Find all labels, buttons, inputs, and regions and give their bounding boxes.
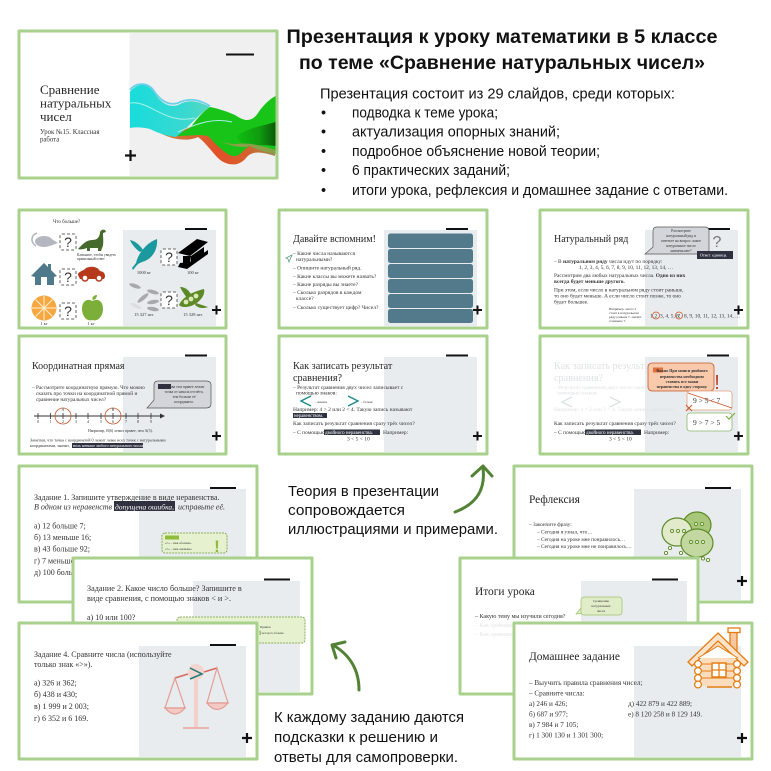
text bbox=[528, 521, 632, 550]
question boxes bbox=[60, 234, 177, 319]
question boxes: ? bbox=[64, 269, 72, 285]
question list: классе? bbox=[296, 296, 314, 302]
callout: натуральных bbox=[591, 604, 611, 608]
caption: theory: сопровождается bbox=[288, 503, 405, 519]
text block: slide list: • bbox=[321, 144, 326, 160]
example note: ряду раньше 7, значит, bbox=[609, 315, 642, 320]
example note: 2 меньше 7. bbox=[609, 319, 626, 323]
bottom note: координатами, значит, bbox=[30, 443, 70, 449]
task list bbox=[34, 678, 89, 723]
text: – Сегодня на уроке мне понравилось… bbox=[536, 537, 625, 543]
callout: точка от начала отсчёта, bbox=[164, 390, 204, 395]
text block: slide list: Презентация состоит из 29 слайдов, среди которых: bbox=[320, 86, 675, 102]
task text bbox=[34, 493, 225, 512]
homework text: г) 1 300 130 и 1 301 300; bbox=[529, 732, 603, 740]
icon: seeds bbox=[129, 282, 159, 312]
callout: Справа тем правее лежит bbox=[164, 385, 205, 389]
weights bbox=[40, 270, 203, 326]
example note: стоит в натуральном bbox=[609, 311, 640, 315]
text: Например: 4 > 2 или 2 < 4. Такую запись называют bbox=[293, 407, 413, 413]
question list: – Сколько существует цифр? Чисел? bbox=[292, 304, 379, 311]
number line: 2 bbox=[62, 419, 64, 424]
text: – В натуральном ряду числа идут по порядку: bbox=[553, 259, 663, 265]
callout: Сравнение bbox=[593, 599, 609, 603]
caption: theory: иллюстрациями и примерами. bbox=[288, 522, 498, 538]
text: Рассмотрим два любых натуральных числа. Одно из них bbox=[554, 272, 686, 279]
arrow: up to theory slides bbox=[455, 466, 492, 512]
caption: hints bbox=[274, 710, 464, 766]
task text: Задание 2. Какое число больше? Запишите в bbox=[87, 584, 242, 593]
number row bbox=[650, 312, 740, 320]
number line: 1 bbox=[50, 419, 52, 424]
number row: 3, 4, 5, 6, bbox=[660, 314, 681, 320]
slide: homework bbox=[514, 623, 752, 759]
text block: slide list: итоги урока, рефлексия и домашнее задание с ответами. bbox=[352, 183, 728, 199]
text: – Какую тему мы изучили сегодня? bbox=[474, 614, 566, 620]
faded text: помощью знаков: bbox=[557, 390, 598, 396]
slide title: чисел bbox=[40, 109, 72, 124]
callout bbox=[147, 381, 211, 408]
heading: Как записать результат bbox=[293, 361, 393, 372]
main heading: по теме «Сравнение натуральных чисел» bbox=[299, 52, 705, 74]
icon: pointer bbox=[286, 255, 292, 262]
homework text: – Сравните числа: bbox=[528, 690, 585, 698]
hint: «<» – знак «меньше» bbox=[165, 547, 192, 551]
warning callout: Важно При записи двойного bbox=[656, 368, 708, 373]
arrow: to task slides bbox=[332, 642, 359, 690]
question boxes: ? bbox=[165, 292, 173, 308]
question boxes: ? bbox=[64, 303, 72, 319]
icon: orange bbox=[32, 296, 56, 320]
subtitle: Урок №15. Классная bbox=[40, 129, 99, 136]
faded text: сравнения? bbox=[554, 373, 604, 384]
question boxes: ? bbox=[165, 249, 173, 265]
task text: допущена ошибка, bbox=[115, 502, 174, 512]
caption: hints: подсказки к решению и bbox=[274, 730, 438, 746]
answers list: д) 100 больше 99. bbox=[34, 568, 94, 577]
caption: hints: ответы для самопроверки. bbox=[274, 750, 458, 766]
number line bbox=[34, 407, 165, 424]
task text: только знак «>»). bbox=[34, 660, 92, 669]
icon: log cabin bbox=[688, 628, 748, 688]
icon: house bbox=[31, 263, 57, 285]
hint: ! bbox=[214, 537, 220, 556]
callout: Рассмотрите bbox=[671, 229, 691, 233]
bottom note: Заметим, что точка с координатой 0 лежит левее всех точек с натуральными bbox=[30, 438, 166, 444]
number line: 4 bbox=[87, 419, 89, 424]
number line: 9 bbox=[150, 419, 152, 424]
text: 3 < 5 < 10 bbox=[609, 436, 632, 442]
bottom note bbox=[30, 438, 166, 449]
faded text: Как записать результат bbox=[554, 361, 654, 372]
right example: 9 > 7 > 5 bbox=[693, 418, 720, 427]
number line: 8 bbox=[137, 419, 139, 424]
highlighted terms: двойного неравенства. bbox=[325, 431, 373, 436]
weights: 1 кг bbox=[87, 321, 95, 326]
text: – Рассмотрите координатную прямую. Что можно bbox=[31, 385, 145, 391]
slide: task 1 bbox=[19, 466, 257, 602]
text: будет большее. bbox=[554, 298, 589, 306]
hint bbox=[177, 617, 305, 643]
icon: car bbox=[78, 267, 105, 279]
main heading bbox=[286, 26, 718, 74]
wrong example: 9 > 5 < 7 bbox=[693, 396, 720, 405]
text block: slide list: • bbox=[321, 163, 326, 179]
text: – С помощью bbox=[553, 430, 586, 436]
heading: Итоги урока bbox=[475, 586, 535, 598]
slide: coordinate line bbox=[19, 336, 226, 454]
callout: натуральный ряд и bbox=[666, 234, 696, 238]
slide: natural series bbox=[540, 210, 748, 328]
text: При этом, если число в натуральном ряду стоит раньше, bbox=[554, 288, 684, 294]
answers list: в) 43 больше 92; bbox=[34, 544, 90, 554]
text block: slide list: • bbox=[321, 124, 326, 140]
task text: Задание 4. Сравните числа (используйте bbox=[34, 650, 172, 659]
text: 3 < 5 < 10 bbox=[347, 436, 370, 442]
number line: 6 bbox=[112, 419, 114, 424]
answers list bbox=[34, 522, 94, 577]
homework text: е) 8 120 258 и 8 129 149. bbox=[628, 710, 702, 718]
hint: «>» – знак «больше» bbox=[165, 541, 192, 545]
hint: ! bbox=[259, 631, 261, 637]
text: Как записать результат сравнения сразу трёх чисел? bbox=[554, 421, 676, 427]
slide: reflection bbox=[514, 466, 752, 602]
slide: writing the comparison bbox=[279, 336, 487, 454]
bottom note: ноль меньше любого натурального числа. bbox=[73, 443, 144, 448]
text: – Сегодня я узнал, что… bbox=[536, 530, 593, 536]
icon: scales bbox=[165, 664, 228, 728]
homework text: а) 246 и 426; bbox=[529, 700, 567, 708]
warning callout: неравенства в одну сторону. bbox=[657, 384, 707, 389]
text block: slide list: 6 практических заданий; bbox=[352, 163, 510, 179]
callout: координата. bbox=[174, 400, 194, 404]
icon: pea pod bbox=[179, 287, 208, 308]
answer button: Ответ: единица. bbox=[700, 252, 727, 258]
text: сравнение натуральных чисел? bbox=[36, 397, 107, 403]
heading: сравнения? bbox=[293, 373, 343, 384]
highlighted terms: неравенством. bbox=[294, 414, 323, 419]
signs bbox=[301, 396, 358, 406]
text block: slide list: • bbox=[321, 183, 326, 199]
plus of reflection slide bbox=[737, 576, 747, 586]
task text: виде сравнения, с помощью знаков < и >. bbox=[87, 594, 231, 603]
text bbox=[553, 259, 686, 306]
callout: натуральное число bbox=[666, 244, 696, 248]
callout bbox=[576, 597, 622, 615]
number row: 2 bbox=[654, 314, 658, 320]
warning callout: неравенства необходимо bbox=[660, 374, 704, 379]
caption: hints: К каждому заданию даются bbox=[274, 710, 464, 726]
number line: A bbox=[62, 407, 65, 412]
text: – Как сравнивать числа? bbox=[474, 632, 538, 638]
answer cover bars bbox=[388, 234, 473, 323]
heading: Рефлексия bbox=[529, 494, 581, 506]
slide: double inequality warning bbox=[540, 336, 748, 454]
text: – Закончите фразу: bbox=[528, 521, 572, 528]
slide: summary bbox=[460, 558, 698, 694]
homework text: – Выучить правила сравнения чисел; bbox=[528, 679, 642, 687]
caption: theory bbox=[288, 484, 498, 538]
faded text: – Результат сравнения двух чисел записывает с bbox=[553, 385, 665, 391]
subtitle: работа bbox=[40, 136, 59, 144]
task text: Задание 1. Запишите утверждение в виде неравенства. bbox=[34, 493, 220, 502]
text: – Результат сравнения двух чисел записывает с bbox=[292, 385, 404, 391]
warning callout bbox=[648, 363, 714, 391]
slide: double inequality warning: двойного неравенства. bbox=[586, 431, 634, 436]
heading: Давайте вспомним! bbox=[293, 234, 376, 245]
question list: – Опишите натуральный ряд. bbox=[292, 264, 362, 272]
text bbox=[292, 385, 415, 442]
callout bbox=[645, 227, 709, 254]
text block: slide list bbox=[320, 86, 728, 199]
slide: writing the comparison: – меньше bbox=[314, 400, 328, 404]
text: Например: bbox=[644, 430, 670, 436]
heading: Натуральный ряд bbox=[554, 234, 628, 245]
answers list: а) 12 больше 7; bbox=[34, 522, 86, 530]
number line: 7 bbox=[125, 419, 127, 424]
callout: чисел bbox=[597, 609, 606, 613]
question boxes: ? bbox=[64, 234, 72, 250]
callout: ответьте на вопрос: какое bbox=[661, 239, 701, 243]
icon: apple bbox=[82, 295, 103, 320]
icon: feather bbox=[130, 239, 157, 270]
number line: 0 bbox=[37, 419, 39, 424]
faded text bbox=[553, 361, 674, 413]
exclamation: ! bbox=[714, 372, 720, 394]
text block: slide list: актуализация опорных знаний; bbox=[352, 124, 560, 140]
right example bbox=[687, 413, 735, 431]
weights: 1 кг bbox=[40, 321, 48, 326]
question mark: ? bbox=[713, 234, 722, 251]
number line: 3 bbox=[75, 419, 77, 424]
question list: – Какие разряды вы знаете? bbox=[292, 282, 359, 288]
question list bbox=[292, 251, 379, 311]
slide: task 2 bbox=[73, 558, 312, 694]
text: – С помощью bbox=[292, 430, 325, 436]
weights: 1000 кг bbox=[137, 270, 151, 275]
number row: 8, 9, 10, 11, 12, 13, 14, … bbox=[684, 314, 740, 320]
text: 1, 2, 3, 4, 5, 6, 7, 8, 9, 10, 11, 12, 13, 14, … bbox=[579, 265, 673, 271]
question list: – Какие числа называются bbox=[292, 251, 355, 257]
text block: slide list: подводка к теме урока; bbox=[352, 106, 498, 122]
number line: 5 bbox=[100, 419, 102, 424]
warning callout: ставить все знаки bbox=[666, 379, 699, 384]
number row: 1, bbox=[650, 314, 655, 320]
text: – Как сравнивать числа? bbox=[474, 623, 538, 629]
task text bbox=[34, 650, 172, 669]
slide title: натуральных bbox=[40, 96, 112, 110]
caption: Кликните, чтобы увидеть bbox=[77, 253, 116, 258]
task text: а) 10 или 100? bbox=[87, 613, 136, 622]
slide: what is bigger bbox=[19, 210, 226, 328]
text bbox=[31, 385, 145, 403]
heading: Домашнее задание bbox=[529, 651, 620, 663]
text block: slide list: • bbox=[321, 106, 326, 122]
answers list: г) 7 меньше 3; bbox=[34, 556, 82, 566]
hint bbox=[162, 533, 227, 556]
text: всегда будет меньше другого. bbox=[554, 278, 625, 285]
caption: правильный ответ bbox=[77, 257, 105, 261]
number row: 7 bbox=[678, 314, 680, 320]
task list: б) 438 и 430; bbox=[34, 690, 77, 699]
text: Как записать результат сравнения сразу трёх чисел? bbox=[293, 421, 415, 427]
text: – Сегодня на уроке мне не понравилось… bbox=[536, 544, 632, 550]
task text bbox=[87, 584, 242, 622]
question list: – Сколько разрядов в каждом bbox=[292, 290, 362, 296]
slide: remember bbox=[279, 210, 487, 328]
highlighted terms bbox=[293, 413, 380, 436]
faded text: Например: 4 > 2 или 2 < 4. Такую запись называют bbox=[554, 407, 674, 413]
text: Например: bbox=[383, 430, 409, 436]
icon: dinosaur bbox=[78, 230, 106, 251]
question list: – Какие классы вы можете назвать? bbox=[292, 274, 377, 280]
hint: Правило bbox=[260, 625, 272, 629]
text: то оно будет меньше. А если число стоит позже, то оно bbox=[554, 292, 681, 300]
task text: исправьте её. bbox=[178, 502, 225, 512]
icon: thought clouds bbox=[662, 512, 713, 562]
text: помощью знаков: bbox=[296, 390, 337, 396]
homework text bbox=[528, 679, 702, 740]
icon: steel beam bbox=[178, 239, 208, 269]
number line: B bbox=[112, 407, 115, 412]
slide title: Сравнение bbox=[40, 82, 100, 97]
slide: task 4 bbox=[19, 623, 257, 759]
wrong example bbox=[686, 391, 732, 411]
callout: наименьшее? bbox=[671, 249, 692, 253]
text: сказать про точки на координатной прямой и bbox=[36, 390, 137, 397]
weights: 15 328 шт. bbox=[183, 312, 203, 317]
icon: mouse bbox=[32, 233, 58, 247]
slide: what is bigger: Что больше? bbox=[53, 220, 81, 225]
example note: Например, число 2 bbox=[609, 307, 637, 312]
slide: title slide bbox=[19, 31, 277, 178]
task text: В одном из неравенств bbox=[34, 502, 113, 512]
homework text: в) 7 984 и 7 105; bbox=[529, 721, 578, 729]
main heading: Презентация к уроку математики в 5 классе bbox=[286, 26, 718, 48]
answer button bbox=[697, 251, 733, 259]
heading: Координатная прямая bbox=[32, 361, 125, 372]
homework text: д) 422 879 и 422 889; bbox=[628, 700, 692, 708]
hint: у которого больше bbox=[260, 631, 284, 635]
homework text: б) 687 и 977; bbox=[529, 710, 568, 718]
callout: тем больше её bbox=[172, 395, 196, 399]
answers list: б) 13 меньше 16; bbox=[34, 533, 91, 542]
caption: theory: Теория в презентации bbox=[288, 484, 439, 500]
text bbox=[553, 421, 676, 442]
question list: натуральными? bbox=[296, 257, 333, 263]
weights: 100 кг bbox=[187, 270, 199, 275]
note: Например, B(6) лежит правее, чем A(3). bbox=[88, 429, 153, 434]
task list: а) 326 и 362; bbox=[34, 678, 77, 688]
task list: г) 6 352 и 6 169. bbox=[34, 714, 88, 723]
text block: slide list: подробное объяснение новой теории; bbox=[352, 144, 600, 160]
slide: writing the comparison: – больше bbox=[360, 400, 373, 404]
text bbox=[474, 614, 566, 638]
task list: в) 1 999 и 2 003; bbox=[34, 702, 89, 711]
weights: 15 327 шт. bbox=[134, 312, 154, 317]
icon: colour wave bbox=[130, 84, 276, 164]
